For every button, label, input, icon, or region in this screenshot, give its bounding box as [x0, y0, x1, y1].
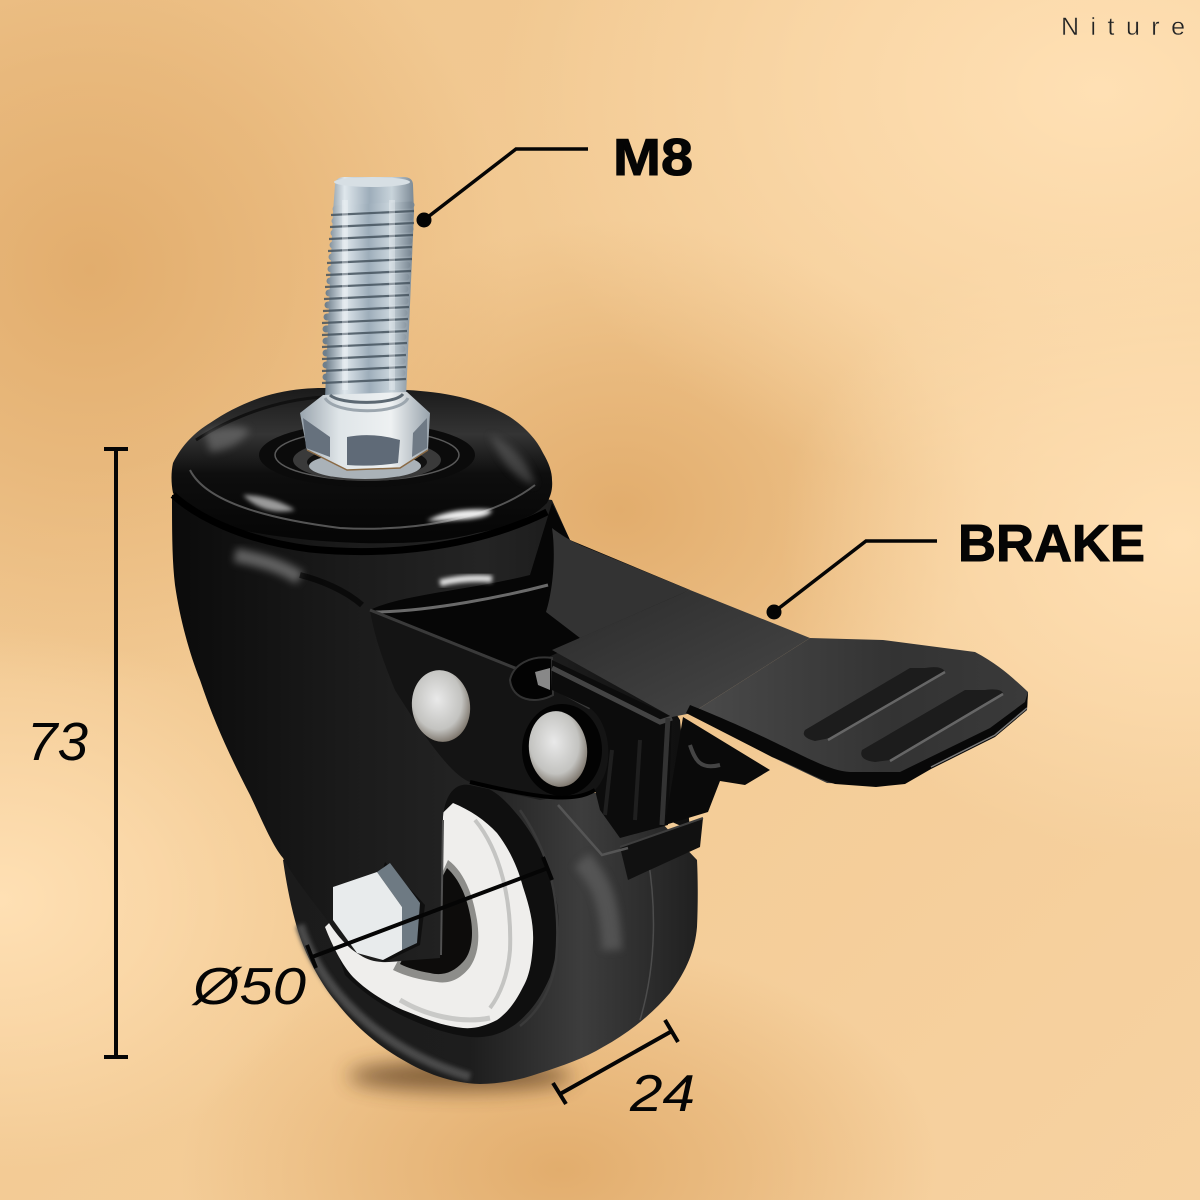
- M8 callout: [416, 129, 693, 228]
- tyre inner ring: [330, 784, 559, 1037]
- rivets: [407, 666, 602, 796]
- wheel: [283, 775, 698, 1084]
- wheel width dimension: 24: [553, 1020, 695, 1123]
- BRAKE callout: [766, 515, 1145, 620]
- top plate flange: [172, 388, 552, 552]
- wheel diameter dimension: 50: Ø50: [191, 958, 306, 1016]
- floor shadow: [348, 1061, 572, 1091]
- M8 callout: M8: [613, 129, 693, 187]
- axle bolt head: [333, 862, 425, 962]
- white hub: [325, 803, 533, 1028]
- brake front housing: [552, 660, 672, 838]
- caster product illustration: [172, 177, 1028, 1091]
- BRAKE callout: BRAKE: [958, 515, 1145, 573]
- side plate: [370, 610, 608, 798]
- fork body: [172, 470, 690, 962]
- wheel diameter dimension: 50: [191, 857, 552, 1016]
- lever band: [552, 590, 810, 717]
- brake tab: [620, 818, 703, 880]
- lever tip: [692, 638, 1028, 785]
- brake pedal: [552, 590, 1028, 880]
- M8 threaded bolt: [322, 177, 414, 398]
- tip underside edge: [686, 692, 1028, 787]
- fork shoulder: [370, 503, 690, 672]
- brake under lever: [665, 717, 770, 825]
- tyre: [283, 775, 698, 1084]
- tread ridges: [804, 667, 945, 741]
- height dimension: 73: [27, 449, 128, 1057]
- hex hole: [510, 657, 553, 700]
- bearing: [393, 860, 478, 982]
- hex nut: [300, 392, 430, 479]
- height dimension: 73: 73: [27, 712, 88, 772]
- wheel width dimension: 24: 24: [629, 1065, 695, 1123]
- brand name: Niture: [1061, 13, 1185, 41]
